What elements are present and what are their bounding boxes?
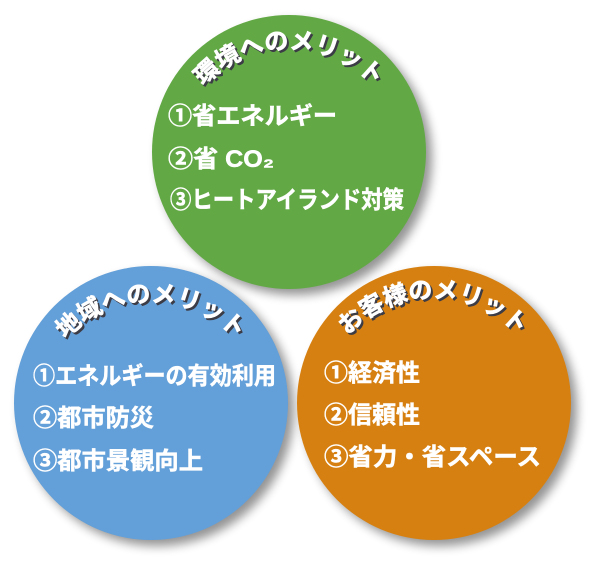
- circle: orange: [297, 266, 571, 540]
- heading: customer merits: お客様のメリット: [340, 282, 525, 335]
- list: environment merits: ③ヒートアイランド対策: [170, 187, 404, 214]
- list: customer merits: ②信頼性: [324, 402, 420, 429]
- circle shadow: green: [158, 21, 432, 295]
- circle shadow: blue: [20, 272, 294, 546]
- circle: blue: [14, 266, 288, 540]
- list: customer merits: ③省力・省スペース: [324, 444, 541, 471]
- list: environment merits: ①省エネルギー: [168, 103, 337, 130]
- heading: community merits: 地域へのメリット: [54, 284, 241, 338]
- panel: customer merits: [296, 266, 584, 552]
- circle shadow: orange: [303, 272, 577, 546]
- heading: community merits: 地域へのメリット: [58, 286, 243, 340]
- list: customer merits: ①経済性: [324, 360, 420, 387]
- panel: environment merits: [152, 14, 438, 302]
- panel: community merits: [14, 266, 299, 552]
- heading: environment merits: 環境へのメリット: [191, 30, 379, 85]
- list: community merits: ③都市景観向上: [33, 448, 203, 475]
- list: environment merits: [168, 103, 404, 214]
- heading: customer merits: お客様のメリット: [338, 280, 523, 333]
- circle: green: [152, 15, 426, 289]
- list: community merits: [33, 363, 276, 475]
- list: community merits: ①エネルギーの有効利用: [33, 363, 276, 390]
- list: customer merits: [324, 360, 541, 471]
- heading: environment merits: 環境へのメリット: [193, 34, 381, 87]
- list: community merits: ②都市防災: [33, 405, 154, 432]
- list: environment merits: ②省 CO₂: [168, 146, 274, 173]
